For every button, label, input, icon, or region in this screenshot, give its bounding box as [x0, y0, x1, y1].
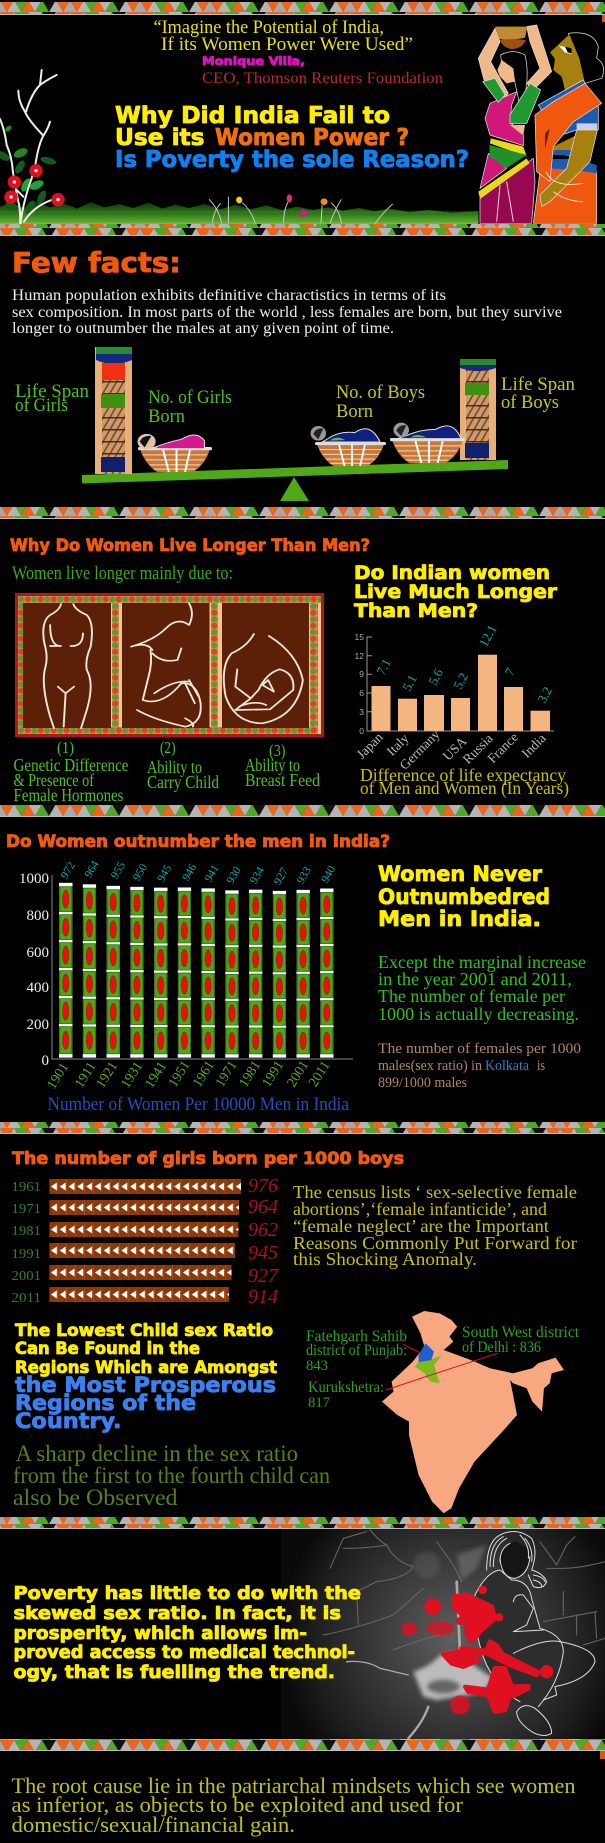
sharp decline text: from the first to the fourth child can — [13, 1463, 330, 1488]
bar chart: women per 1000 men: 941 — [203, 863, 222, 884]
reason 2: Ability to — [147, 757, 202, 777]
icon: baby in womb — [224, 634, 303, 723]
basket with baby boy — [311, 426, 386, 466]
label: life span of girls: Life Span — [15, 381, 89, 402]
poverty statement: ogy, that is fuelling the trend. — [14, 1663, 335, 1683]
callout text: in the year 2001 and 2011, — [378, 969, 572, 989]
label: life span of boys: Life Span — [501, 374, 575, 395]
ground blotches — [413, 1545, 493, 1700]
basket with baby girl — [138, 434, 212, 472]
heading: Why Do Women Live Longer Than Men? — [10, 536, 370, 555]
sharp decline text: also be Observed — [13, 1485, 178, 1510]
panel: poverty and prosperity — [14, 1529, 605, 1739]
chart caption: Difference of life expectancy — [360, 765, 566, 785]
pictogram bars by census year: 1991 — [12, 1247, 41, 1262]
chart caption: Number of Women Per 10000 Men in India — [48, 1094, 350, 1115]
photo: cracked ground with girl and blood — [281, 1529, 605, 1739]
bar chart: women per 1000 men: 600 — [26, 945, 49, 961]
basket with second baby boy — [390, 423, 465, 463]
label: no. of girls born: Born — [148, 406, 185, 427]
reason 3: Ability to — [245, 755, 300, 775]
panel: do women outnumber men — [6, 832, 586, 1115]
header panel — [0, 17, 604, 224]
reason 3 — [245, 741, 320, 790]
intro text: sex composition. In most parts of the world , less females are born, but they survive — [12, 304, 562, 321]
bar chart: life expectancy difference: USA — [440, 734, 470, 764]
census text: “female neglect’ are the Important — [293, 1216, 549, 1236]
pictogram bars by census year: 964 — [248, 1196, 278, 1218]
balance scale — [82, 347, 508, 501]
bar chart: women per 1000 men: 1901 — [45, 1060, 72, 1092]
callout text: The number of female per — [378, 986, 565, 1006]
bar chart: women per 1000 men: 1971 — [213, 1058, 241, 1090]
pillar: life span of boys — [460, 359, 496, 460]
callout text — [378, 952, 586, 1024]
pictogram bars by census year: 1981 — [12, 1224, 41, 1239]
map label: Kurukshetra: 817 — [308, 1395, 330, 1411]
pictogram bars by census year: 1961 — [12, 1180, 41, 1195]
bar chart: women per 1000 men: 1941 — [143, 1059, 170, 1091]
map label: South West Delhi: South West district — [462, 1324, 580, 1341]
kolkata note: 899/1000 males — [378, 1075, 467, 1091]
main title: Is Poverty the sole Reason? — [115, 147, 469, 173]
bar chart: women per 1000 men — [19, 859, 353, 1092]
bar chart: women per 1000 men: 1991 — [260, 1058, 287, 1090]
bar chart: life expectancy difference: 7.1 — [373, 656, 394, 677]
bar chart: women per 1000 men: 1921 — [94, 1059, 121, 1091]
main title: Use its — [115, 125, 204, 151]
poverty statement: prosperity, which allows im- — [14, 1624, 307, 1644]
map label: Kurukshetra: Kurukshetra: — [308, 1379, 384, 1396]
bar chart: women per 1000 men: 1931 — [119, 1059, 146, 1091]
lowest child sex ratio text: the Most Prosperous — [15, 1373, 276, 1398]
lowest child sex ratio text: Country. — [15, 1409, 122, 1434]
lowest child sex ratio text: Regions Which are Amongst — [15, 1358, 277, 1377]
fulcrum — [280, 477, 309, 501]
bar chart: life expectancy difference: 5.2 — [450, 670, 471, 691]
bar chart: life expectancy difference: Italy — [384, 730, 412, 759]
quote author: Monique Villa, — [202, 54, 305, 68]
pictogram bars by census year: 2011 — [12, 1291, 41, 1306]
label: life span of boys: of Boys — [501, 392, 559, 413]
intro text: Human population exhibits definitive charactistics in terms of its — [12, 287, 446, 304]
lowest child sex ratio text: Can Be Found in the — [15, 1339, 200, 1358]
reason 1: Genetic Difference — [14, 755, 128, 775]
map label: South West Delhi — [462, 1324, 580, 1356]
census text: this Shocking Anomaly. — [293, 1249, 477, 1269]
reason 3: Breast Feed — [245, 770, 320, 790]
reason 2: Carry Child — [147, 772, 219, 792]
label: no. of girls born — [148, 387, 232, 427]
reason 1: (1) — [57, 738, 74, 757]
pictogram bars by census year: 914 — [248, 1286, 278, 1308]
quote — [154, 17, 413, 55]
bar chart: women per 1000 men: 934 — [248, 865, 267, 886]
bar chart: life expectancy difference: 5.6 — [425, 666, 446, 687]
kolkata note: is — [537, 1058, 545, 1074]
sharp decline text — [13, 1441, 330, 1510]
quote: “Imagine the Potential of India, — [154, 17, 384, 38]
panel: why women live longer — [10, 536, 569, 805]
bar chart: life expectancy difference: 12.1 — [476, 622, 500, 649]
map label: South West Delhi: of Delhi : 836 — [462, 1339, 541, 1356]
lowest child sex ratio text — [15, 1321, 277, 1434]
map label: Fatehgarh Sahib: district of Punjab: — [306, 1342, 407, 1359]
bar chart: life expectancy difference: 3 — [359, 707, 364, 717]
bar chart: life expectancy difference: India — [519, 731, 549, 761]
icon: plant with red flowers — [0, 70, 65, 223]
heading: Few facts: — [12, 246, 181, 279]
chart heading: Live Much Longer — [354, 582, 558, 603]
label: no. of girls born: No. of Girls — [148, 387, 232, 408]
label: no. of boys born: Born — [336, 401, 373, 422]
label: no. of boys born — [336, 382, 425, 422]
bar chart: women per 1000 men: 940 — [319, 864, 338, 885]
chart heading: Do Indian women — [354, 563, 550, 584]
grass flowers — [209, 194, 393, 224]
conclusion text: domestic/sexual/financial gain. — [12, 1812, 295, 1837]
callout heading — [378, 862, 550, 932]
bar chart: women per 1000 men: 1951 — [166, 1058, 194, 1090]
bar chart: life expectancy difference: 9 — [359, 669, 364, 679]
map label: Kurukshetra — [308, 1379, 384, 1411]
poverty statement: Poverty has little to do with the — [14, 1584, 361, 1604]
bar chart: women per 1000 men: 1961 — [190, 1058, 218, 1090]
callout heading: Outnumbedred — [378, 885, 550, 910]
kolkata note: males(sex ratio) in — [378, 1058, 482, 1074]
poverty statement — [14, 1584, 361, 1683]
woman in orange — [533, 33, 604, 223]
bar chart: women per 1000 men: 955 — [109, 860, 128, 881]
kolkata note: Kolkata — [485, 1058, 529, 1074]
chart heading — [354, 563, 558, 622]
bar chart: life expectancy difference: Germany — [397, 726, 443, 773]
bar chart: life expectancy difference — [353, 622, 555, 773]
chart heading: Than Men? — [354, 601, 478, 622]
reason 2: (2) — [160, 738, 176, 757]
conclusion text: as inferior, as objects to be exploited and used for — [12, 1792, 464, 1817]
chart caption — [360, 765, 569, 799]
pictogram bars by census year: 945 — [248, 1242, 278, 1264]
illustrated reasons frame — [15, 593, 324, 737]
pictogram bars by census year: 1971 — [12, 1202, 41, 1217]
bar chart: women per 1000 men: 2011 — [306, 1059, 334, 1090]
poverty statement: proved access to medical technol- — [14, 1643, 355, 1663]
bar chart: women per 1000 men: 946 — [180, 862, 199, 883]
bar chart: life expectancy difference: France — [484, 729, 521, 766]
bar chart: women per 1000 men: 927 — [272, 866, 291, 887]
icon: pregnant woman — [131, 603, 201, 727]
census text: Reasons Commonly Put Forward for — [293, 1233, 577, 1253]
woman with pot — [478, 25, 552, 223]
bar chart: women per 1000 men: 933 — [295, 865, 314, 886]
bar chart: women per 1000 men: 400 — [26, 980, 49, 996]
bar chart: women per 1000 men: 950 — [131, 862, 150, 883]
pictogram bars by census year: 962 — [248, 1219, 278, 1241]
panel: girls born per 1000 boys — [12, 1149, 580, 1513]
panel: few facts — [12, 246, 575, 501]
lowest child sex ratio text: Regions of the — [15, 1391, 196, 1416]
girl outline — [475, 1532, 595, 1735]
bar chart: women per 1000 men: 800 — [26, 908, 49, 924]
conclusion text — [12, 1773, 576, 1837]
pictogram bars by census year: 927 — [248, 1265, 279, 1287]
bar chart: life expectancy difference: 5.1 — [399, 672, 420, 693]
kolkata note — [378, 1041, 581, 1091]
red splatter — [404, 1588, 551, 1712]
bar chart: life expectancy difference: 6 — [359, 688, 364, 698]
bar chart: life expectancy difference: 3.2 — [534, 684, 555, 705]
beam — [82, 460, 508, 484]
bar chart: life expectancy difference: Russia — [460, 731, 496, 767]
bar chart: women per 1000 men: 2001 — [285, 1058, 312, 1090]
quote: If its Women Power Were Used” — [161, 34, 413, 55]
bar chart: women per 1000 men: 964 — [83, 859, 102, 880]
pictogram bars by census year — [12, 1175, 279, 1308]
illustration: two women — [478, 25, 604, 223]
author title: CEO, Thomson Reuters Foundation — [202, 70, 443, 87]
callout text: 1000 is actually decreasing. — [378, 1004, 579, 1024]
chart caption: of Men and Women (In Years) — [360, 778, 569, 799]
bar chart: women per 1000 men: 1911 — [72, 1060, 100, 1091]
bar chart: women per 1000 men: 930 — [225, 865, 244, 886]
label: life span of boys — [501, 374, 575, 413]
lowest child sex ratio text: The Lowest Child sex Ratio — [15, 1321, 273, 1340]
intro text — [12, 287, 562, 337]
bar chart: women per 1000 men: 1981 — [237, 1058, 264, 1090]
pictogram bars by census year: 976 — [248, 1175, 278, 1197]
bar chart: women per 1000 men: 200 — [26, 1017, 49, 1033]
map of India — [382, 1311, 564, 1513]
kolkata note: The number of females per 1000 — [378, 1041, 581, 1057]
icon: female body — [43, 604, 92, 728]
main title: Why Did India Fail to — [115, 103, 390, 129]
callout heading: Women Never — [378, 862, 542, 887]
map label: Fatehgarh Sahib — [306, 1328, 407, 1374]
bar chart: life expectancy difference: Japan — [353, 729, 386, 762]
callout text: Except the marginal increase — [378, 952, 586, 972]
census text: The census lists ‘ sex-selective female — [293, 1182, 577, 1202]
heading: Do Women outnumber the men in India? — [6, 832, 390, 851]
reason 1: & Presence of — [14, 770, 94, 790]
bar chart: women per 1000 men: 945 — [155, 863, 174, 884]
label: life span of girls — [15, 381, 89, 416]
callout heading: Men in India. — [378, 907, 541, 932]
sharp decline text: A sharp decline in the sex ratio — [16, 1441, 298, 1466]
bar chart: women per 1000 men: 1000 — [19, 871, 49, 887]
reason 3: (3) — [269, 741, 286, 760]
main title — [115, 103, 469, 173]
reason 1: Female Hormones — [14, 785, 124, 805]
heading: The number of girls born per 1000 boys — [12, 1149, 404, 1168]
intro text: longer to outnumber the males at any given point of time. — [12, 320, 394, 337]
census text: abortions’,‘female infanticide’, and — [293, 1199, 547, 1219]
reason 1 — [14, 738, 128, 805]
bar chart: women per 1000 men: 972 — [59, 860, 78, 881]
map label: Fatehgarh Sahib: 843 — [306, 1358, 328, 1374]
pillar: life span of girls — [95, 347, 132, 474]
bar chart: women per 1000 men: 0 — [42, 1053, 49, 1069]
poverty statement: skewed sex ratio. In fact, it is — [14, 1604, 341, 1624]
pictogram bars by census year: 2001 — [12, 1269, 41, 1284]
label: no. of boys born: No. of Boys — [336, 382, 425, 403]
bar chart: life expectancy difference: 0 — [359, 726, 364, 736]
conclusion text: The root cause lie in the patriarchal mindsets which see women — [12, 1773, 576, 1798]
reason 2 — [147, 738, 219, 792]
bar chart: life expectancy difference: 15 — [355, 632, 364, 642]
subheading: Women live longer mainly due to: — [12, 563, 233, 584]
census text — [293, 1182, 577, 1269]
label: life span of girls: of Girls — [15, 395, 68, 416]
map label: Fatehgarh Sahib: Fatehgarh Sahib — [306, 1328, 407, 1345]
bar chart: life expectancy difference: 7 — [501, 665, 518, 678]
grass — [0, 201, 478, 224]
main title: Women Power ? — [215, 125, 409, 151]
bar chart: life expectancy difference: 12 — [355, 651, 364, 661]
ground veins — [323, 1530, 605, 1738]
